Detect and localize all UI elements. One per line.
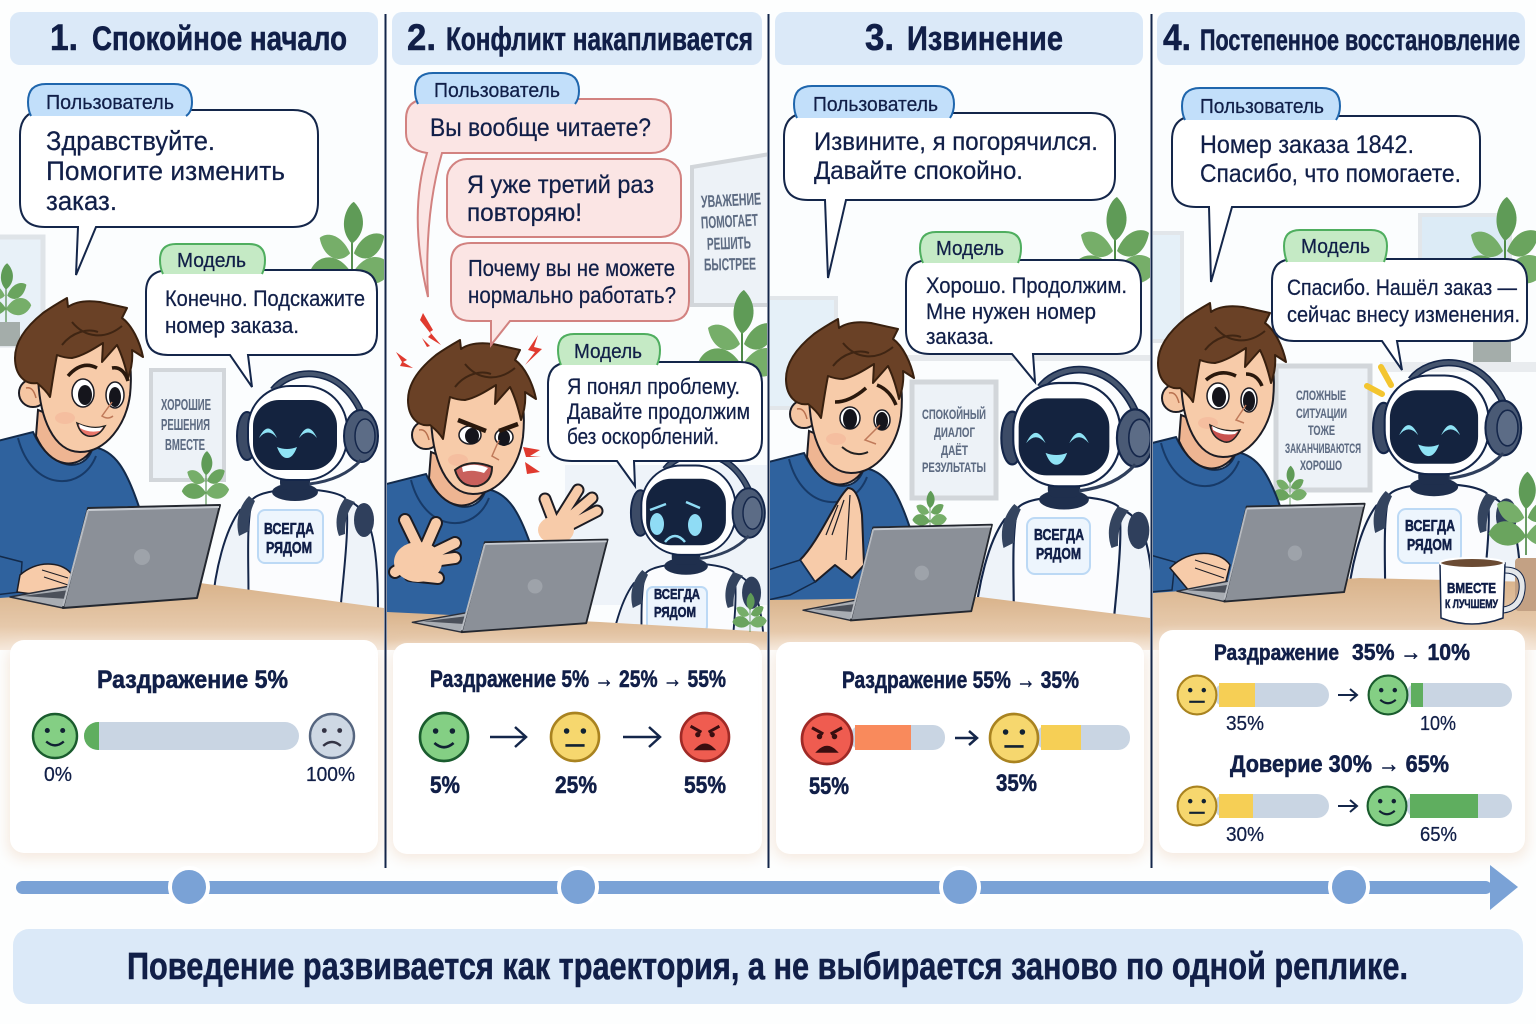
table xyxy=(770,597,1150,650)
user bubble 3: Пользователь xyxy=(813,94,938,116)
robot: ВСЕГДА xyxy=(1405,518,1455,535)
sparkle marks xyxy=(1367,367,1391,394)
user bubble 3: Извините, я погорячился. xyxy=(814,128,1098,156)
irritation row: 35% xyxy=(1226,713,1264,735)
user bubble 1: Пользователь xyxy=(46,92,174,114)
user bubbles 2: Вы вообще читаете? xyxy=(430,114,651,142)
window xyxy=(768,298,1150,408)
header 3: 3. xyxy=(865,17,894,58)
model bubble 3: Мне нужен номер xyxy=(926,299,1096,324)
window xyxy=(0,237,43,346)
model bubble 3 xyxy=(906,232,1141,382)
user bubble 1: заказ. xyxy=(46,186,117,216)
stat card 2: 5% xyxy=(430,772,460,799)
mug: К ЛУЧШЕМУ xyxy=(1445,597,1498,611)
laptop xyxy=(412,540,608,632)
conclusion banner xyxy=(13,929,1523,1004)
robot xyxy=(1349,359,1522,582)
stat card 3: 55% xyxy=(809,773,849,800)
robot xyxy=(212,374,378,622)
person angry xyxy=(387,339,537,615)
user bubbles 2: Почему вы не можете xyxy=(468,255,675,281)
column dividers xyxy=(386,14,1152,868)
trust row: 65% xyxy=(1420,824,1457,846)
hand left xyxy=(394,520,455,582)
header 4 xyxy=(1157,12,1525,65)
mug: ВМЕСТЕ xyxy=(1447,580,1496,597)
plant xyxy=(1079,197,1150,282)
robot sad xyxy=(615,462,766,632)
poster xyxy=(912,382,996,498)
stat card 2: 25% xyxy=(555,772,597,799)
robot sad: РЯДОМ xyxy=(654,605,696,621)
header 1 xyxy=(10,12,378,65)
user bubbles 2: нормально работать? xyxy=(468,282,676,308)
mug xyxy=(1440,558,1522,624)
poster: ХОРОШИЕ xyxy=(161,397,211,414)
robot: ВСЕГДА xyxy=(1034,527,1084,544)
plant xyxy=(698,290,767,377)
stat card 3: 35% xyxy=(996,770,1037,797)
irritation row: 10% xyxy=(1420,713,1456,735)
header 1: Спокойное начало xyxy=(92,20,347,58)
model bubble 2: без оскорблений. xyxy=(567,424,719,449)
person apologetic xyxy=(770,318,915,600)
model bubble 1 xyxy=(146,244,377,387)
user bubble 4: Пользователь xyxy=(1200,96,1324,118)
robot: РЯДОМ xyxy=(1036,546,1081,563)
stat card 2 xyxy=(391,643,764,858)
irritation row: Раздражение xyxy=(1214,640,1339,665)
stat card 1: 0% xyxy=(44,764,72,786)
model bubble 2: Давайте продолжим xyxy=(567,399,750,424)
user bubble 4: Номер заказа 1842. xyxy=(1200,131,1414,159)
model bubble 4: Модель xyxy=(1301,236,1370,258)
robot: ВСЕГДА xyxy=(264,521,314,538)
robot: РЯДОМ xyxy=(266,540,312,557)
model bubble 3: Хорошо. Продолжим. xyxy=(926,273,1127,298)
robot xyxy=(976,366,1150,618)
trust row: 30% xyxy=(1226,824,1264,846)
stat card 2: 55% xyxy=(684,772,726,799)
header 2: Конфликт накапливается xyxy=(446,21,753,57)
panel 4 scene xyxy=(1153,197,1536,650)
anger marks xyxy=(396,313,542,474)
plant xyxy=(1471,197,1536,284)
poster: ДАЁТ xyxy=(941,442,968,458)
poster: БЫСТРЕЕ xyxy=(704,255,756,274)
user bubble 1: Помогите изменить xyxy=(46,156,285,186)
user bubble 1 xyxy=(20,84,318,275)
model bubble 3: Модель xyxy=(936,238,1004,260)
header 1: 1. xyxy=(50,17,78,58)
header 2: 2. xyxy=(407,17,436,58)
poster xyxy=(151,370,224,480)
user bubble 1: Здравствуйте. xyxy=(46,126,215,156)
windows xyxy=(1150,215,1536,372)
model bubble 2 xyxy=(548,334,762,486)
poster: ВМЕСТЕ xyxy=(165,437,205,454)
panel 3 scene xyxy=(770,197,1150,650)
poster: УВАЖЕНИЕ xyxy=(701,189,761,212)
panel 3: apology xyxy=(741,12,1157,858)
header 4: 4. xyxy=(1163,17,1191,58)
right plant xyxy=(1489,472,1536,555)
header 3 xyxy=(775,12,1143,65)
table xyxy=(387,612,767,650)
stat card 3: Раздражение 55% → 35% xyxy=(842,667,1079,694)
panel 1: calm start xyxy=(0,12,392,858)
trust row xyxy=(1178,751,1512,846)
header 3: Извинение xyxy=(907,20,1063,58)
user bubbles 2: повторяю! xyxy=(467,199,582,227)
person happy xyxy=(1153,302,1287,593)
user bubbles 2: Я уже третий раз xyxy=(467,171,654,199)
poster: ПОМОГАЕТ xyxy=(701,211,759,233)
robot: РЯДОМ xyxy=(1407,537,1452,554)
stat card 2: Раздражение 5% → 25% → 55% xyxy=(430,666,726,693)
poster: ХОРОШО xyxy=(1300,457,1342,473)
stat card 1: Раздражение 5% xyxy=(97,666,288,694)
user bubble 3: Давайте спокойно. xyxy=(814,157,1023,185)
plant pot xyxy=(1515,558,1536,611)
poster: ТОЖЕ xyxy=(1308,422,1335,438)
hand right xyxy=(538,490,597,544)
stat card 1: 100% xyxy=(306,764,355,786)
robot sad: ВСЕГДА xyxy=(654,587,700,603)
poster: СИТУАЦИИ xyxy=(1296,405,1347,421)
laptop xyxy=(10,505,220,608)
stat card 1 xyxy=(8,640,380,858)
poster xyxy=(1276,366,1370,490)
panel 4: gradual recovery xyxy=(1113,12,1536,858)
poster: СЛОЖНЫЕ xyxy=(1296,387,1346,403)
timeline arrow xyxy=(16,865,1518,910)
table xyxy=(0,583,384,650)
user bubble 3 xyxy=(784,86,1115,278)
poster: СПОКОЙНЫЙ xyxy=(922,405,986,422)
stat card 4 xyxy=(1157,630,1527,858)
poster: ДИАЛОГ xyxy=(934,424,975,440)
window xyxy=(565,465,770,605)
laptop xyxy=(803,525,992,620)
stat card 3 xyxy=(774,642,1146,858)
model bubble 4 xyxy=(1272,230,1527,370)
model bubble 2: Модель xyxy=(574,341,642,363)
irritation row xyxy=(1178,639,1512,735)
poster: РЕЗУЛЬТАТЫ xyxy=(922,459,986,475)
irritation row: 35% → 10% xyxy=(1352,639,1470,665)
model bubble 1: Конечно. Подскажите xyxy=(165,286,365,311)
trust row: Доверие 30% → 65% xyxy=(1230,751,1449,778)
plant xyxy=(311,202,384,284)
sleeve and hand xyxy=(0,555,72,595)
poster: РЕШЕНИЯ xyxy=(161,417,210,434)
user bubbles 2 xyxy=(406,73,689,345)
model bubble 2: Я понял проблему. xyxy=(567,374,740,399)
model bubble 1: номер заказа. xyxy=(165,313,299,338)
laptop xyxy=(1177,504,1365,602)
poster: ЗАКАНЧИВАЮТСЯ xyxy=(1285,440,1361,456)
person xyxy=(0,298,143,620)
model bubble 3: заказа. xyxy=(926,324,994,349)
poster xyxy=(692,154,770,305)
panel 2: conflict builds xyxy=(363,12,784,858)
table xyxy=(1153,578,1536,650)
user bubbles 2: Пользователь xyxy=(434,80,560,102)
user bubble 4: Спасибо, что помогаете. xyxy=(1200,160,1461,188)
panel 2 scene xyxy=(387,152,767,650)
panel 1 scene xyxy=(0,202,384,650)
user bubble 4 xyxy=(1172,88,1480,282)
model bubble 1: Модель xyxy=(177,250,246,272)
poster: РЕШИТЬ xyxy=(707,233,751,254)
header 2 xyxy=(392,12,762,65)
